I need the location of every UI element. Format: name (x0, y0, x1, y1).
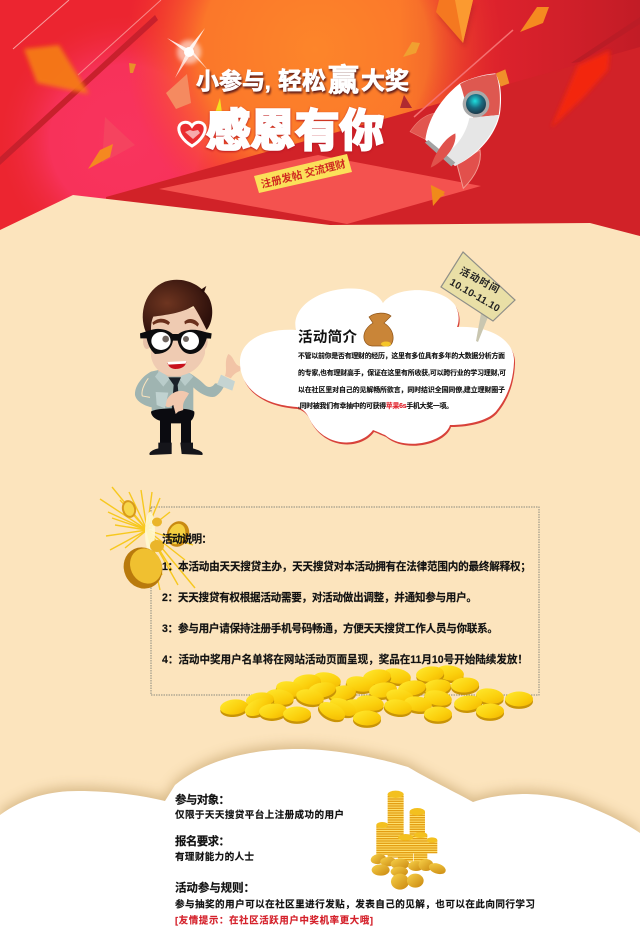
coin burst (100, 487, 195, 595)
footer text: 仅限于天天搜贷平台上注册成功的用户 (175, 809, 344, 821)
footer text: 报名要求： (175, 834, 230, 848)
tag: 注册发帖 交流理财 (260, 157, 348, 191)
rules heading: 活动说明： (162, 532, 212, 546)
coins in burst (117, 498, 193, 595)
gold coin pile (219, 664, 533, 728)
headline: 小参与,轻松赢大奖: 轻松 (278, 68, 326, 95)
mouth (167, 362, 186, 369)
glasses (140, 329, 212, 354)
rules text: 1：本活动由天天搜贷主办，天天搜贷对本活动拥有在法律范围内的最终解释权； (162, 560, 531, 573)
rules text: 4：活动中奖用户名单将在网站活动页面呈现，奖品在11月10号开始陆续发放！ (162, 653, 528, 666)
body (135, 370, 225, 413)
headline: 小参与,轻松赢大奖: 大奖 (361, 68, 409, 95)
intro text: ,同时被我们有幸抽中的可获得苹果6s手机大奖一项。 (298, 401, 453, 410)
ears and face (143, 334, 151, 349)
date sign (441, 252, 515, 342)
intro text: 以在社区里对自己的见解畅所欲言，同时结识全国同僚,建立理财圈子 (298, 385, 505, 394)
red hint: [友情提示：在社区活跃用户中奖机率更大哦] (175, 914, 373, 926)
rules text: 3：参与用户请保持注册手机号码畅通，方便天天搜贷工作人员与你联系。 (162, 622, 498, 635)
star flare (167, 28, 208, 78)
footer text: 活动参与规则： (175, 880, 255, 894)
shards (24, 0, 610, 206)
hair (143, 280, 212, 332)
banner (0, 0, 640, 245)
date sign: 活动时间 (458, 264, 502, 296)
shoes (149, 443, 172, 455)
character (135, 280, 241, 455)
dashed rules box (151, 507, 539, 695)
coin stacks (370, 791, 447, 890)
icon: heart handshake (179, 122, 205, 146)
rocket (410, 69, 509, 200)
rules text (162, 532, 531, 666)
rules text: 2：天天搜贷有权根据活动需要，对活动做出调整，并通知参与用户。 (162, 591, 477, 604)
eyebrows (152, 319, 170, 325)
cream banner edge (0, 195, 640, 245)
platform (159, 155, 481, 224)
tie (168, 377, 181, 413)
hands (165, 391, 189, 414)
footer text: 有理财能力的人士 (175, 851, 254, 863)
footer text (175, 792, 535, 926)
intro text: 的专家,也有理财高手，保证在这里有所收获,可以跨行业的学习理财,可 (298, 368, 506, 377)
heading: 活动简介: 活动简介 (298, 328, 358, 346)
intro text (298, 351, 506, 410)
footer text: 参与抽奖的用户可以在社区里进行发贴，发表自己的见解，也可以在此向同行学习 (175, 898, 535, 910)
cloud speech bubble (240, 288, 515, 446)
footer text: 参与对象： (175, 792, 230, 806)
icon: money bag (364, 313, 393, 346)
headline: 小参与,轻松赢大奖: 小参与 (196, 68, 265, 94)
cloud body (240, 288, 514, 444)
neck and shirt (158, 357, 188, 377)
headline: 小参与,轻松赢大奖: 赢 (328, 63, 359, 98)
headline: 小参与,轻松赢大奖 (196, 63, 409, 98)
legs (151, 408, 194, 443)
intro text: 不管以前你是否有理财的经历，这里有多位具有多年的大数据分析方面 (298, 351, 505, 360)
main title: 感恩有你: 感恩有你 (206, 107, 384, 156)
cloud body (0, 749, 640, 941)
headline: 小参与,轻松赢大奖: , (265, 72, 271, 94)
hand back (225, 354, 241, 378)
date sign: 10.10-11.10 (448, 277, 502, 315)
cuff (217, 375, 235, 391)
white cloud footer (0, 745, 640, 941)
